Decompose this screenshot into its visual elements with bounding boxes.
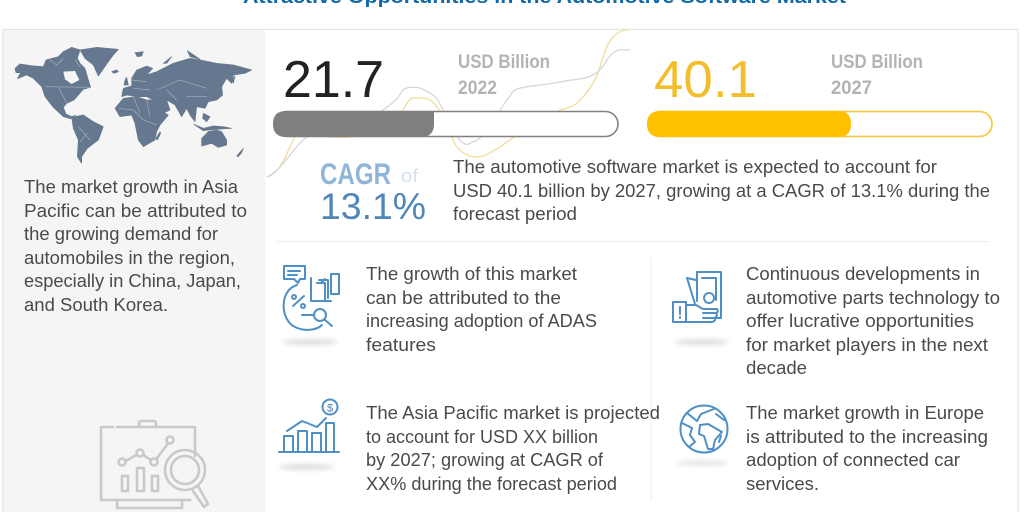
bar: 2027 progress bbox=[647, 111, 992, 137]
icon: rising bars with dollar coin: $ bbox=[327, 402, 333, 414]
text: ADAS driver: The growth of this market bbox=[366, 264, 577, 284]
text: parts technology: decade bbox=[746, 358, 807, 378]
text: ADAS driver: can be attributed to the bbox=[366, 288, 561, 308]
text: region note bbox=[24, 177, 247, 315]
stat: 2022 market value: USD Billion bbox=[458, 52, 550, 73]
icon: analytics with magnifier bbox=[282, 266, 339, 345]
stat: 2022 market value bbox=[273, 51, 618, 137]
bar: 2022 progress bbox=[273, 111, 618, 137]
text: market summary: The automotive software market is expected to account for bbox=[453, 157, 937, 177]
text: Europe driver: services. bbox=[746, 474, 819, 494]
text: Europe driver: The market growth in Europe bbox=[746, 403, 984, 423]
text: Europe driver bbox=[746, 403, 988, 494]
icon: world map bbox=[15, 47, 252, 163]
text: region note: automobiles in the region, bbox=[24, 248, 235, 268]
icon: hand holding banknotes bbox=[673, 272, 729, 345]
text: region note: the growing demand for bbox=[24, 224, 218, 244]
text: ADAS driver: features bbox=[366, 335, 436, 355]
text: market summary: USD 40.1 billion by 2027, growing at a CAGR of 13.1% during the bbox=[453, 181, 990, 201]
text: region note: and South Korea. bbox=[24, 295, 168, 315]
panel: regional sidebar bbox=[4, 30, 266, 512]
text: parts technology bbox=[746, 264, 1000, 378]
text: parts technology: offer lucrative opportunities bbox=[746, 311, 974, 331]
text: Asia Pacific projection: by 2027; growing at CAGR of bbox=[366, 450, 604, 470]
text: Asia Pacific projection bbox=[366, 403, 660, 494]
panel: parts technology bbox=[673, 264, 1000, 378]
stat: CAGR bbox=[320, 158, 426, 227]
icon: globe bbox=[676, 406, 728, 466]
panel: Europe connected cars bbox=[676, 403, 988, 494]
text: parts technology: automotive parts technology to bbox=[746, 288, 1000, 308]
text: parts technology: for market players in the next bbox=[746, 335, 988, 355]
text: Asia Pacific projection: The Asia Pacific market is projected bbox=[366, 403, 660, 423]
icon: presentation board with magnifier bbox=[101, 421, 208, 508]
text: ADAS driver: increasing adoption of ADAS bbox=[366, 311, 597, 331]
text: parts technology: Continuous developments in bbox=[746, 264, 980, 284]
chart: background trend lines bbox=[267, 30, 630, 177]
stat: 2027 market value: 40.1 bbox=[654, 51, 757, 109]
text: market summary: forecast period bbox=[453, 204, 577, 224]
stat: 2027 market value: USD Billion bbox=[831, 52, 923, 73]
text: region note: Pacific can be attributed to bbox=[24, 201, 247, 221]
text: Europe driver: is attributed to the increasing bbox=[746, 427, 988, 447]
text: Asia Pacific projection: to account for USD XX billion bbox=[366, 427, 598, 447]
text: market summary bbox=[453, 157, 990, 224]
text: Europe driver: adoption of connected car bbox=[746, 450, 960, 470]
text: ADAS driver bbox=[366, 264, 597, 355]
text: region note: especially in China, Japan, bbox=[24, 271, 241, 291]
stat: 2027 market value: 2027 bbox=[831, 78, 872, 99]
stat: 2027 market value bbox=[647, 51, 992, 137]
stat: CAGR: of bbox=[401, 166, 419, 186]
icon: rising bars with dollar coin bbox=[279, 400, 339, 470]
text: Asia Pacific projection: XX% during the forecast period bbox=[366, 474, 617, 494]
panel: Asia Pacific projection bbox=[279, 400, 660, 494]
stat: 2022 market value: 21.7 bbox=[283, 51, 384, 109]
stat: CAGR: 13.1% bbox=[320, 186, 426, 227]
stat: 2022 market value: 2022 bbox=[458, 78, 497, 99]
panel: ADAS growth driver bbox=[282, 264, 597, 355]
stat: CAGR: CAGR bbox=[320, 158, 391, 191]
text: region note: The market growth in Asia bbox=[24, 177, 239, 197]
